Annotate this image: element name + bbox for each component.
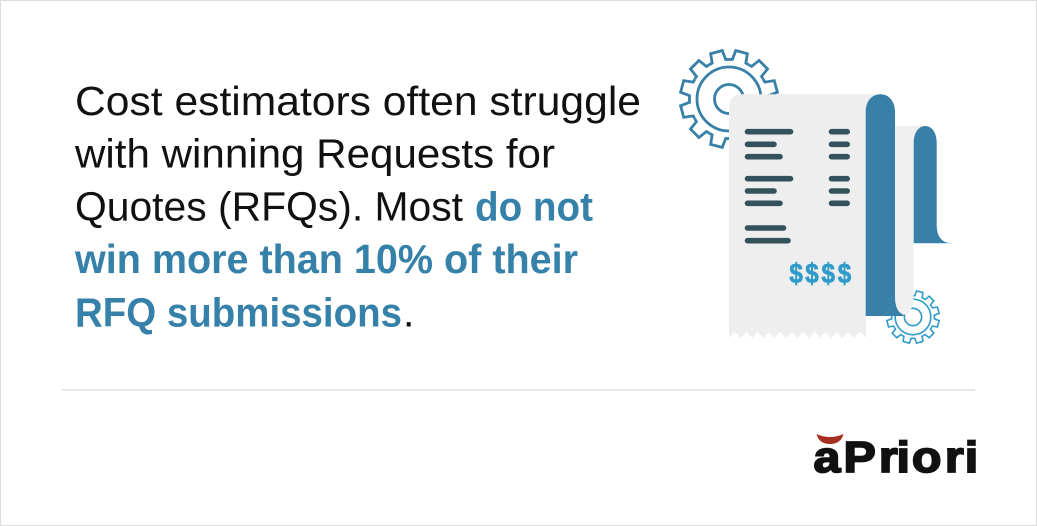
headline text block: do not xyxy=(475,184,593,230)
icon: large gear xyxy=(680,50,778,148)
logo red arc xyxy=(816,434,844,444)
headline text block: RFQ submissions xyxy=(75,290,402,336)
icon: receipt scroll xyxy=(729,94,952,338)
dollar signs: $$$$ xyxy=(789,260,852,290)
headline text block xyxy=(74,78,641,336)
aPriori logo: aPriori xyxy=(813,432,978,482)
icon: small gear xyxy=(886,290,940,344)
headline text block: Cost estimators often struggle xyxy=(75,78,641,124)
headline text block: with winning Requests for xyxy=(74,130,555,176)
headline text block: . xyxy=(403,290,414,336)
rear roll xyxy=(914,126,952,243)
headline text block: Quotes (RFQs). Most xyxy=(75,184,464,230)
receipt line items xyxy=(748,132,847,241)
headline text block: win more than 10% of their xyxy=(74,236,578,282)
back sheet fold xyxy=(885,126,928,315)
receipt main sheet xyxy=(729,94,882,338)
front roll xyxy=(866,94,906,316)
